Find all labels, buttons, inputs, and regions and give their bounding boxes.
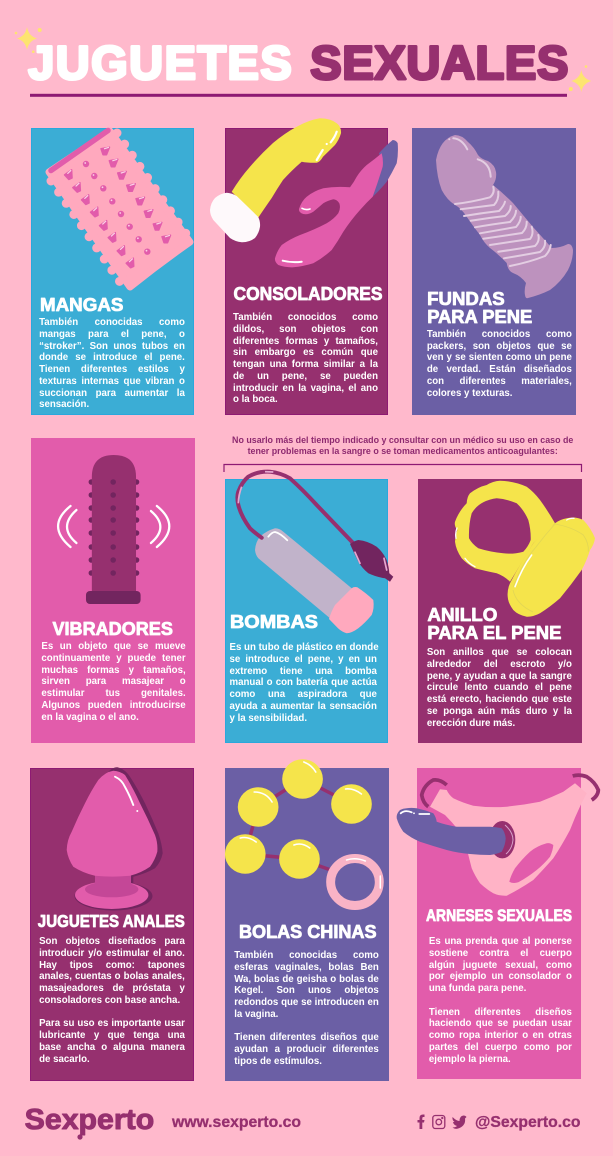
icon: sleeve [46, 128, 194, 290]
text: mangas: texturas internas que vibran o [39, 376, 185, 387]
heading: fundas para pene: FUNDAS [427, 288, 504, 309]
text: mangas: “stroker”. Son unos tubos en [39, 341, 185, 352]
heading: consoladores: CONSOLADORES [234, 283, 382, 304]
text: bombas: y la sensibilidad. [230, 713, 307, 724]
text: consoladores: También conocidos como [233, 312, 378, 323]
heading: mangas: MANGAS [40, 294, 123, 315]
text: bolas chinas: redondos que se introducen en [234, 997, 379, 1008]
logo: sexperto: Sexperto [25, 1104, 154, 1136]
text: arneses sexuales: Tienen diferentes diseños [429, 1007, 572, 1018]
heading: vibradores: VIBRADORES [53, 618, 173, 639]
panel: juguetes anales [30, 768, 194, 1081]
text: consoladores: tengan una forma similar a la [233, 359, 378, 370]
icon: vibrating ring [454, 480, 595, 617]
heading: anillo para el pene [427, 604, 562, 643]
text: anillo: circule lento cuando el pene [427, 682, 572, 693]
text: bombas: se introduce el pene, y en un [230, 654, 377, 665]
heading: bolas chinas: BOLAS CHINAS [238, 921, 376, 942]
website: www.sexperto.co [171, 1114, 301, 1131]
icon: instagram [433, 1116, 445, 1128]
text: fundas [426, 329, 572, 399]
text: arneses sexuales: algún juguete sexual, como [429, 960, 572, 971]
text: consoladores: introducir en la vagina, el ano [233, 383, 378, 394]
text: fundas: de verdad. Están diseñados [427, 364, 572, 375]
text: bolas chinas: la vagina. [234, 1009, 278, 1020]
heading: fundas para pene [427, 288, 532, 327]
text: mangas: Tienen diferentes estilos y [39, 364, 185, 375]
panel: fundas [412, 128, 576, 415]
title word: juguetes: JUGUETES [28, 36, 292, 89]
text: bombas: manual o con batería que actúa [230, 677, 377, 688]
icon: penis pump [235, 470, 394, 634]
panel: anillo [418, 479, 582, 743]
text: vibradores: estimular tus genitales. [41, 688, 186, 699]
icon: sparkle left [15, 27, 42, 53]
text: bombas: ayuda a aumentar la sensación [230, 701, 377, 712]
text: vibradores: en la vagina o el ano. [41, 712, 139, 723]
text: arneses sexuales: Es una prenda que al ponerse [429, 936, 572, 947]
text: juguetes anales: lubricante y que tenga una [39, 1030, 185, 1041]
text: bombas: como una aspiradora que [230, 689, 377, 700]
text: mangas: sensación. [39, 399, 89, 410]
text: anillo: alrededor del escroto y/o [427, 659, 572, 670]
text: anillo [427, 647, 572, 729]
warning note: tener problemas en la sangre o se toman medicamentos anticoagulantes: [248, 446, 558, 456]
text: juguetes anales: consoladores con base ancha. [39, 995, 180, 1006]
text: bolas chinas [234, 950, 379, 1067]
text: anillo: erección dure más. [427, 718, 515, 729]
icon: anal plug [66, 767, 163, 910]
panel: vibradores [31, 438, 195, 743]
text: fundas: ven y se sienten como un pene [427, 352, 572, 363]
text: bolas chinas: Tienen diferentes diseños que [234, 1032, 379, 1043]
icon: sparkle right [569, 65, 591, 92]
text: consoladores [233, 312, 378, 405]
text: arneses sexuales: partes del cuerpo como por [429, 1042, 572, 1053]
icon: strap-on harness [396, 773, 600, 896]
text: juguetes anales: de sacarlo. [39, 1054, 90, 1065]
text: vibradores [41, 641, 186, 723]
title underline [30, 94, 567, 97]
panel: consoladores [225, 128, 388, 415]
text: bolas chinas: tipos de estímulos. [234, 1056, 322, 1067]
text: vibradores: continuamente y puede tener [41, 653, 186, 664]
text: juguetes anales: Para su uso es importante usar [39, 1018, 185, 1029]
panel: arneses sexuales [417, 768, 581, 1079]
panel: mangas [31, 128, 194, 415]
text: arneses sexuales: por ejemplo un consolador o [429, 971, 572, 982]
heading: anillo para el pene: ANILLO [427, 604, 497, 625]
text: anillo: pene, y ayudan a que la sangre [427, 671, 572, 682]
text: vibradores: Es un objeto que se mueve [41, 641, 186, 652]
heading: juguetes anales: JUGUETES ANALES [37, 911, 184, 931]
warning bracket [223, 464, 582, 472]
heading: arneses sexuales: ARNESES SEXUALES [426, 907, 572, 925]
text: arneses sexuales: haciendo que se puedan usar [429, 1018, 572, 1029]
text: fundas: packers, son objetos que se [427, 341, 572, 352]
icon: facebook [418, 1114, 424, 1129]
text: juguetes anales [39, 936, 185, 1065]
text: juguetes anales: masajeadores de próstata y [39, 983, 185, 994]
social handle: @Sexperto.co [475, 1114, 580, 1131]
text: arneses sexuales: una funda para pene. [429, 983, 526, 994]
icon: dildo and rabbit vibrator [210, 118, 398, 268]
text: juguetes anales: base ancha o alguna manera [39, 1042, 185, 1053]
text: bolas chinas: Wa, bolas de geisha o bolas de [234, 974, 379, 985]
text: consoladores: diferentes formas y tamaños, [233, 336, 378, 347]
text: mangas: También conocidas como [39, 317, 185, 328]
text: vibradores: muchas formas y tamaños, [41, 665, 186, 676]
text: bombas [230, 642, 379, 724]
text: bolas chinas: También conocidas como [234, 950, 379, 961]
text: arneses sexuales [429, 936, 572, 1065]
text: fundas: colores y texturas. [427, 388, 512, 399]
text: arneses sexuales: sostiene contra el cuerpo [429, 948, 572, 959]
text: mangas: mangas para el pene, o [39, 329, 185, 340]
icon: kegel balls [224, 759, 384, 910]
text: arneses sexuales: como ropa interior o en otras [429, 1030, 572, 1041]
warning note [232, 435, 573, 456]
text: mangas: donde se introduce el pene. [39, 352, 185, 363]
text: arneses sexuales: ejemplo la pierna. [429, 1054, 511, 1065]
text: juguetes anales: anales, cuentas o bolas anales, [39, 971, 185, 982]
text: fundas: También conocidos como [427, 329, 572, 340]
text: consoladores: o la boca. [233, 394, 278, 405]
panel: bombas [224, 479, 388, 743]
text: anillo: está erecto, haciendo que este [427, 694, 572, 705]
text: mangas [39, 317, 185, 410]
icon: penis sleeve [436, 135, 573, 298]
text: juguetes anales: Hay tipos como: tapones [39, 960, 185, 971]
text: consoladores: sin embargo es común que [233, 347, 378, 358]
title word: sexuales: SEXUALES [310, 36, 568, 89]
text: bolas chinas: ayudan a producir diferentes [234, 1044, 379, 1055]
text: bombas: Es un tubo de plástico en donde [230, 642, 379, 653]
warning note: No usarlo más del tiempo indicado y consultar con un médico su uso en caso de [232, 435, 573, 445]
heading: fundas para pene: PARA PENE [427, 306, 532, 327]
icon: twitter [452, 1116, 466, 1129]
title [14, 27, 591, 97]
footer [25, 1104, 580, 1140]
text: fundas: con diferentes materiales, [427, 376, 572, 387]
text: anillo: Son anillos que se colocan [427, 647, 572, 658]
text: bombas: extremo tiene una bomba [230, 666, 377, 677]
text: bolas chinas: esferas vaginales, bolas Ben [234, 962, 379, 973]
panel: bolas chinas [224, 768, 388, 1081]
text: mangas: succionan para aumentar la [39, 388, 185, 399]
text: vibradores: Algunos pueden introducirse [41, 700, 186, 711]
text: juguetes anales: Son objetos diseñados para [39, 936, 185, 947]
text: juguetes anales: introducir y/o estimular el ano. [39, 948, 185, 959]
text: anillo: se ponga aún más duro y la [427, 706, 572, 717]
text: bolas chinas: Kegel. Son unos objetos [234, 985, 379, 996]
text: consoladores: dildos, son objetos con [233, 324, 378, 335]
icon: vibrator [56, 455, 170, 604]
text: vibradores: sirven para masajear o [41, 676, 186, 687]
heading: bombas: BOMBAS [230, 611, 318, 632]
heading: anillo para el pene: PARA EL PENE [427, 622, 561, 643]
text: consoladores: de un pene, se pueden [233, 371, 378, 382]
